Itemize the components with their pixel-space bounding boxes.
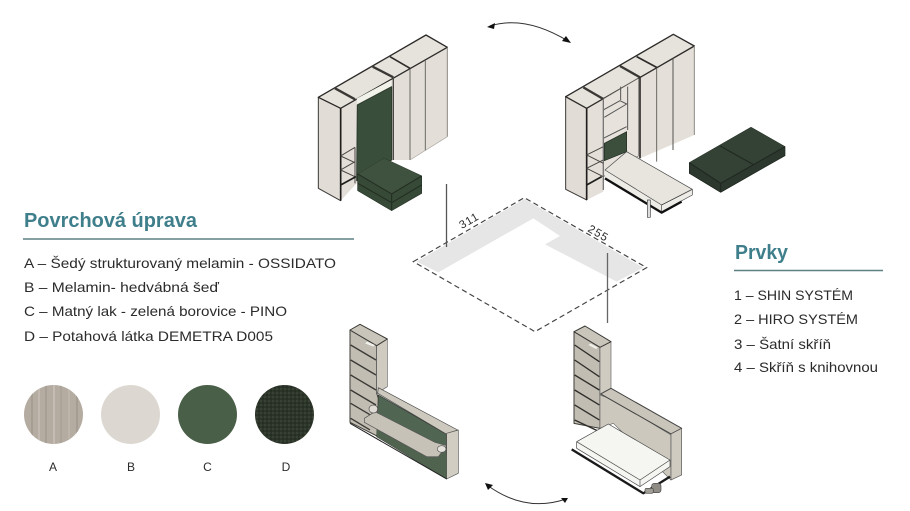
text block: elements list: 1 – SHIN SYSTÉM [734, 287, 853, 303]
text block: finish list: D – Potahová látka DEMETRA D005 [24, 328, 273, 344]
arrow: top rotation [487, 23, 571, 43]
heading: Prvky: Prvky [735, 242, 789, 264]
dimension 255: 255 [585, 223, 610, 245]
text block: finish list [24, 255, 336, 344]
swatch labels: C [203, 460, 212, 474]
text block: finish list: B – Melamin- hedvábná šeď [24, 279, 219, 295]
footprint shading [417, 199, 643, 282]
illustration: bookcase with fold-down sofa [350, 324, 458, 479]
swatch labels: A [49, 460, 57, 474]
swatch D: dark green fabric [255, 385, 314, 444]
illustration: bookcase with open double bed [572, 326, 682, 493]
text block: finish list: C – Matný lak - zelená borovice - PINO [24, 303, 287, 319]
text block: elements list [734, 287, 878, 375]
connector line right [606, 253, 608, 323]
illustration: closed wardrobe with green door and ottoman [318, 35, 447, 211]
sofa unit [350, 388, 458, 479]
text block: elements list: 2 – HIRO SYSTÉM [734, 311, 858, 327]
text block: elements list: 3 – Šatní skříň [734, 336, 831, 352]
heading: Povrchová úprava: Povrchová úprava [24, 210, 198, 232]
text block: elements list: 4 – Skříň s knihovnou [734, 359, 878, 375]
swatch labels [49, 460, 291, 474]
swatch A: grey wood melamine [24, 385, 83, 445]
floor plan [413, 198, 647, 332]
text block: finish list: A – Šedý strukturovaný melamin - OSSIDATO [24, 255, 336, 271]
bookcase [350, 324, 387, 437]
swatch labels: B [127, 460, 135, 474]
arrow: bottom rotation [485, 483, 568, 504]
illustration: wardrobe with open single bed [566, 34, 694, 217]
connector line left [446, 184, 448, 247]
swatch labels: D [282, 460, 291, 474]
swatch C: matte green lacquer [178, 385, 237, 444]
illustration: dark green ottoman laid flat [689, 127, 785, 192]
swatch B: silk grey melamine [101, 385, 160, 444]
dimension 311: 311 [457, 211, 482, 232]
dashed outline [413, 198, 647, 332]
